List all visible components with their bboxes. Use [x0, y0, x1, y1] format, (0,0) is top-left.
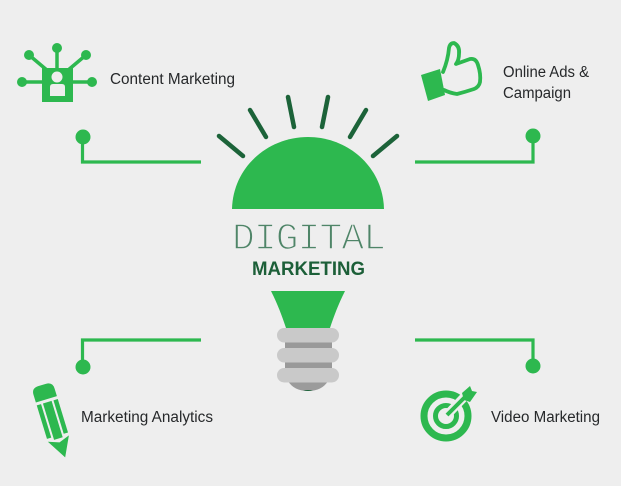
- label: marketing analytics: Marketing Analytics: [81, 409, 213, 426]
- bulb dome: [232, 137, 384, 209]
- connector: top left: [76, 130, 201, 162]
- bulb neck: [271, 291, 345, 328]
- light rays: [219, 97, 397, 156]
- icon: target with arrow: [424, 386, 477, 438]
- icon: content marketing network: [17, 43, 97, 102]
- label: online ads and campaign: Online Ads &: [503, 64, 590, 81]
- label: online ads and campaign: [503, 64, 590, 102]
- heading: digital: DIGITAL: [232, 218, 386, 261]
- icon: thumbs up: [421, 43, 480, 101]
- heading: marketing: MARKETING: [252, 259, 365, 280]
- label: video marketing: Video Marketing: [491, 409, 600, 426]
- label: online ads and campaign: Campaign: [503, 85, 571, 102]
- icon: pencil: [31, 382, 75, 461]
- bulb screw base: [277, 328, 339, 391]
- label: content marketing: Content Marketing: [110, 71, 235, 88]
- connector: top right: [415, 128, 540, 162]
- connector: bottom left: [76, 340, 201, 374]
- connector: bottom right: [415, 340, 540, 374]
